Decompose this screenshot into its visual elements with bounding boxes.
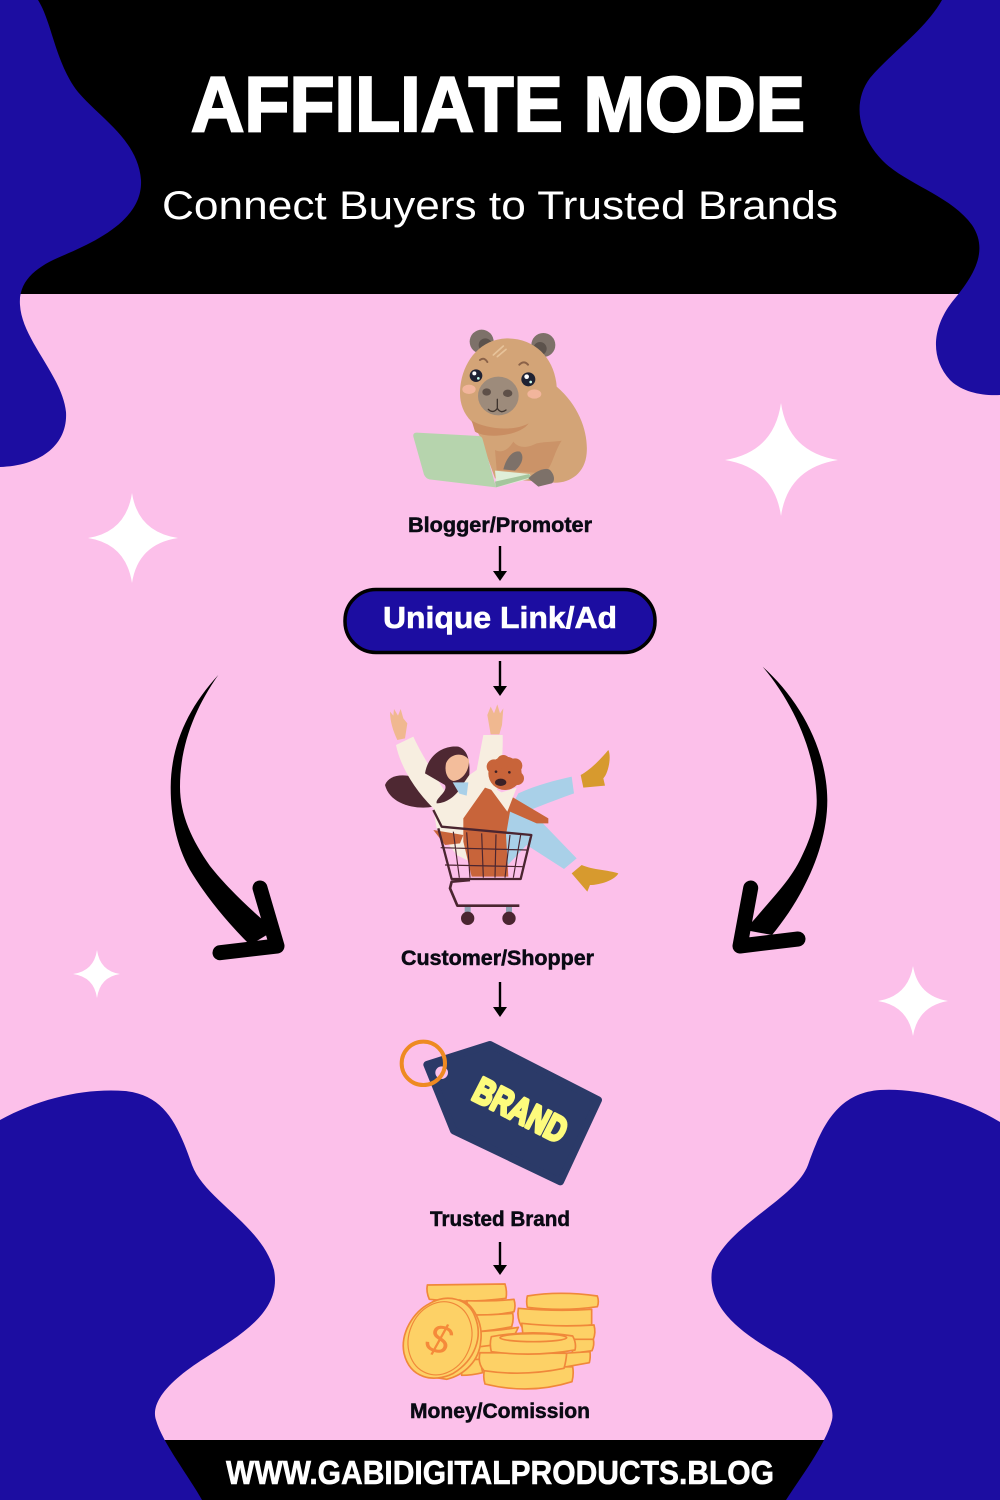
pill: unique link <box>345 590 655 652</box>
arrow: blogger to link <box>493 546 507 581</box>
footer url: WWW.GABIDIGITALPRODUCTS.BLOG <box>226 1454 774 1491</box>
arrow: link to customer <box>493 661 507 696</box>
icon: coin stacks <box>397 1284 598 1389</box>
arrow: brand to money <box>493 1242 507 1275</box>
pill: unique link: Unique Link/Ad <box>383 600 617 635</box>
arrow: customer to brand <box>493 982 507 1017</box>
icon: woman and dog in shopping cart <box>385 704 618 925</box>
blob: bottom right <box>711 1090 1000 1500</box>
footer band <box>150 1440 850 1500</box>
sparkle: upper right <box>725 403 838 516</box>
curved arrow: right <box>740 667 827 946</box>
sparkle: lower left <box>73 950 120 998</box>
label: money: Money/Comission <box>410 1400 590 1423</box>
label: blogger: Blogger/Promoter <box>408 514 592 537</box>
icon: brand tag <box>402 1042 598 1182</box>
header band <box>0 0 1000 294</box>
icon: brand tag: BRAND <box>467 1069 574 1151</box>
label: trusted brand: Trusted Brand <box>430 1208 570 1231</box>
icon: coin stacks: $ <box>420 1313 458 1365</box>
label: customer: Customer/Shopper <box>401 947 594 970</box>
sparkle: upper left <box>88 493 178 583</box>
blob: bottom left <box>0 1090 275 1500</box>
blob: top left <box>0 0 141 467</box>
blob: top right <box>860 0 1000 395</box>
subtitle: Connect Buyers to Trusted Brands <box>162 184 838 228</box>
curved arrow: left <box>171 675 277 953</box>
title: AFFILIATE MODE <box>191 60 805 148</box>
icon: capybara with laptop <box>413 330 587 487</box>
sparkle: lower right <box>878 966 948 1036</box>
